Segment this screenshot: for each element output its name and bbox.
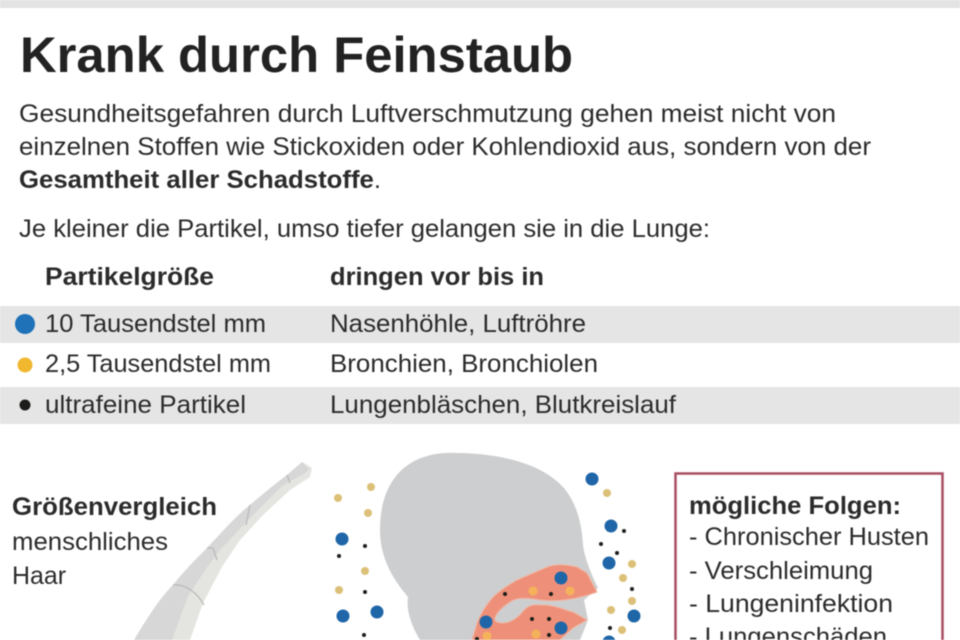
row: 10 thousandths bbox=[0, 306, 960, 343]
airways bbox=[472, 565, 597, 640]
size comparison label: menschliches bbox=[12, 528, 168, 556]
yellow particles in airways bbox=[482, 586, 574, 640]
icon: human hair bbox=[134, 462, 312, 640]
panel: possible consequences: - Lungeninfektion bbox=[689, 590, 893, 618]
intro text: einzelnen Stoffen wie Stickoxiden oder Kohlendioxid aus, sondern von der bbox=[19, 133, 871, 161]
panel: possible consequences: - Verschleimung bbox=[689, 557, 873, 585]
intro text: Gesundheitsgefahren durch Luftverschmutzung gehen meist nicht von bbox=[19, 100, 836, 128]
subheading: Je kleiner die Partikel, umso tiefer gelangen sie in die Lunge: bbox=[19, 215, 710, 243]
panel: possible consequences: mögliche Folgen: bbox=[689, 492, 901, 520]
table header: particle size: Partikelgröße bbox=[45, 263, 214, 291]
panel: possible consequences bbox=[676, 474, 942, 640]
size comparison label: Haar bbox=[12, 562, 66, 590]
row: ultrafine: ultrafeine Partikel bbox=[45, 391, 246, 419]
blue particles bbox=[336, 472, 640, 640]
row: 10 thousandths: 10 Tausendstel mm bbox=[45, 310, 266, 338]
row: 2.5 thousandths: 2,5 Tausendstel mm bbox=[45, 350, 271, 378]
table header: penetration depth: dringen vor bis in bbox=[330, 263, 544, 291]
panel: possible consequences: - Chronischer Husten bbox=[689, 523, 929, 551]
row: 2.5 thousandths: Bronchien, Bronchiolen bbox=[330, 350, 598, 378]
row: 10 thousandths: Nasenhöhle, Luftröhre bbox=[330, 310, 586, 338]
row: 2.5 thousandths bbox=[18, 350, 598, 378]
intro text bbox=[19, 100, 871, 194]
size comparison label: Größenvergleich bbox=[12, 493, 217, 521]
illustration: head with particles bbox=[334, 453, 640, 640]
title: Krank durch Feinstaub bbox=[20, 27, 573, 83]
size comparison label bbox=[12, 493, 217, 590]
ultrafine particles bbox=[337, 529, 634, 640]
yellow particles bbox=[334, 483, 636, 634]
intro text: Gesamtheit aller Schadstoffe . bbox=[19, 166, 381, 194]
head silhouette bbox=[380, 453, 598, 640]
row: ultrafine: Lungenbläschen, Blutkreislauf bbox=[330, 391, 676, 419]
particle table bbox=[0, 263, 960, 424]
row: ultrafine bbox=[0, 387, 960, 424]
